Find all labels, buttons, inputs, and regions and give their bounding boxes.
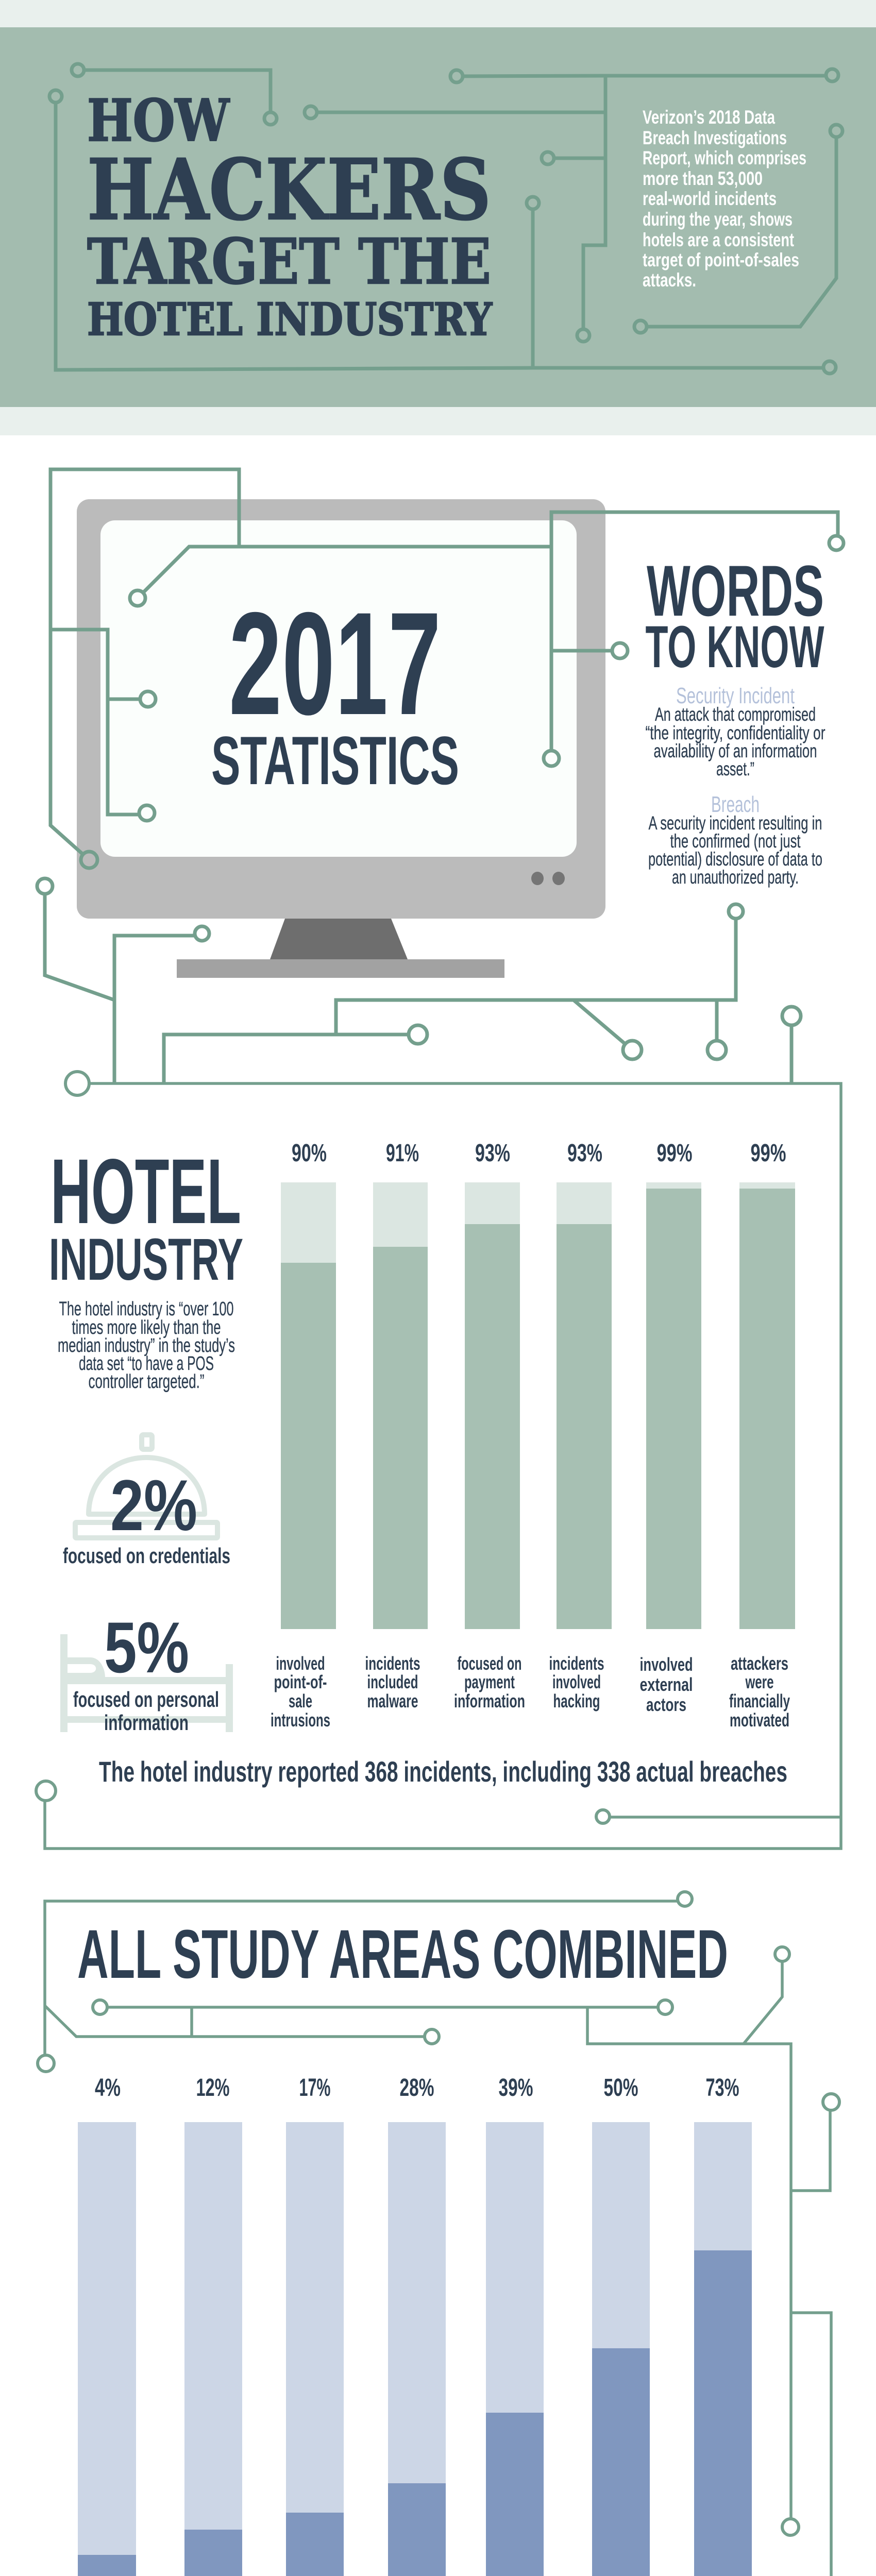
bar labels: malware [367,1690,418,1711]
intro paragraph: Report, which comprises [643,147,806,168]
bar values: 99% [750,1140,786,1167]
bar labels: involved [552,1671,601,1692]
bar values: 90% [292,1140,327,1167]
bar values: 12% [196,2074,230,2102]
panel: words to know [645,550,826,888]
heading: words to know [645,550,824,680]
bar labels: information [454,1690,525,1711]
bars [281,1182,795,1629]
text block: hotel industry description: times more likely than the [72,1317,221,1338]
title: HACKERS [87,141,491,239]
definition: security incident: Security Incident [676,683,795,708]
bar values: 39% [499,2074,533,2102]
bars [78,2122,752,2576]
intro paragraph [643,107,806,291]
bar labels: included [367,1671,418,1692]
panel: header banner [0,0,876,435]
text block: hotel industry description: median industry” in the study’s [58,1335,235,1357]
bar values: 73% [706,2074,739,2102]
heading: 2017 statistics: STATISTICS [211,723,459,799]
bar labels: hacking [553,1690,600,1711]
intro paragraph: target of point-of-sales [643,249,799,270]
title [87,88,493,346]
bar labels: intrusions [271,1709,330,1731]
monitor illustration [77,499,605,978]
title: HOW [87,88,230,155]
icon: service bell [75,1435,217,1538]
definition: breach [648,792,822,888]
circuit frame: hotel industry section [36,1072,841,1849]
bar values: 50% [604,2074,638,2102]
definition: breach: the confirmed (not just [670,831,801,852]
bar values: 17% [299,2074,331,2102]
bar values: 91% [386,1140,419,1167]
bar values: 28% [400,2074,434,2102]
bar values: 93% [475,1140,510,1167]
bar labels: focused on [458,1653,521,1674]
stat: 2% focused on credentials with bell icon [63,1435,230,1568]
title: HOTEL INDUSTRY [87,294,493,346]
definition: breach: an unauthorized party. [672,867,799,888]
bar labels [271,1653,790,1731]
heading: hotel industry [49,1140,243,1293]
bar labels: point-of- [274,1671,327,1692]
heading: hotel industry: INDUSTRY [49,1227,243,1293]
bar values [95,2074,739,2102]
text block: hotel industry description: controller targeted.” [89,1371,204,1393]
bar labels: incidents [365,1653,420,1674]
intro paragraph: Verizon’s 2018 Data [643,107,775,128]
stat: 5% focused on personal information with bed icon: information [104,1710,189,1735]
bar labels: attackers [731,1653,788,1674]
stat: 5% focused on personal information with bed icon: 5% [104,1607,189,1688]
text block: hotel industry description [58,1298,235,1393]
bar labels: incidents [549,1653,604,1674]
bar labels: sale [289,1690,312,1711]
bar labels: were [745,1671,774,1692]
definition: breach: Breach [711,792,760,817]
stat: 5% focused on personal information with bed icon: focused on personal [73,1687,219,1711]
circuit lines: statistics section [37,469,844,1083]
intro paragraph: hotels are a consistent [643,229,794,250]
bar values: 4% [95,2074,121,2102]
heading: 2017 statistics: 2017 [229,582,441,745]
text block: hotel industry description: data set “to have a POS [79,1353,214,1375]
stat: 2% focused on credentials with bell icon: focused on credentials [63,1544,230,1568]
header circuit lines [49,64,843,374]
bar chart: all study areas [77,2074,756,2576]
bar values: 93% [567,1140,602,1167]
heading: 2017 statistics [211,582,459,799]
bar values: 99% [656,1140,693,1167]
bar labels: financially [729,1690,790,1711]
bar labels: motivated [730,1709,789,1731]
stat: 2% focused on credentials with bell icon: 2% [110,1465,197,1546]
intro paragraph: real-world incidents [643,188,777,209]
bar labels: external [640,1674,693,1695]
intro paragraph: more than 53,000 [643,168,763,189]
title: TARGET THE [87,225,491,298]
intro paragraph: Breach Investigations [643,127,787,148]
bar labels: involved [640,1654,693,1675]
definition: security incident [645,683,826,779]
definition: security incident: asset.” [716,758,754,779]
bar labels: payment [464,1671,515,1692]
icon: bed [60,1634,233,1732]
bar chart: hotel industry [271,1140,795,1731]
stat: 5% focused on personal information with bed icon [60,1607,233,1735]
circuit lines: all study areas section [38,1892,839,2576]
intro paragraph: attacks. [643,269,696,291]
bar labels: involved [276,1653,325,1674]
intro paragraph: during the year, shows [643,209,793,230]
bar values [292,1140,786,1167]
bar labels: actors [646,1694,686,1715]
text block: hotel industry description: The hotel industry is “over 100 [59,1298,234,1320]
heading: hotel industry: HOTEL [50,1140,241,1243]
